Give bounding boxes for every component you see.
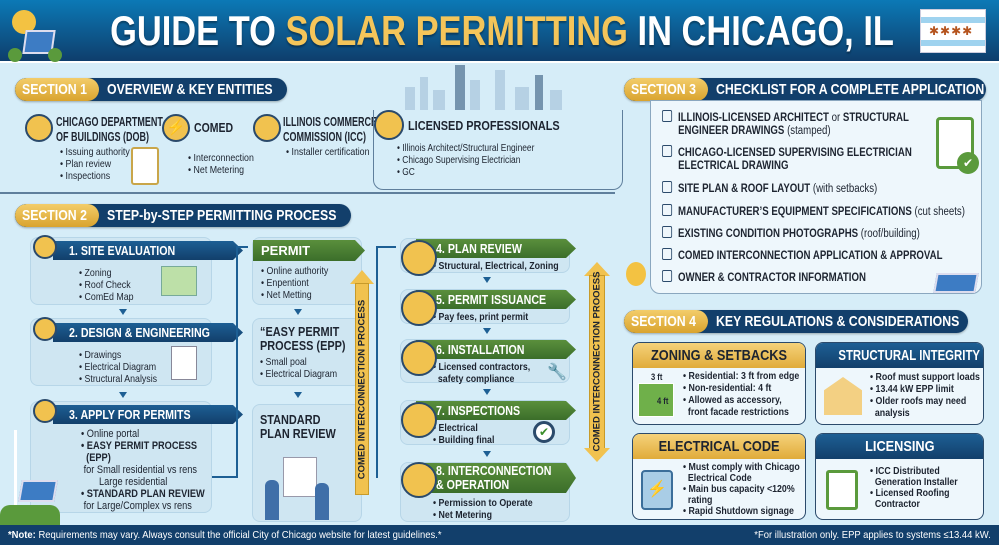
entity: ComEd: • Interconnection (188, 152, 254, 164)
step 3: apply for permits: Large residential (99, 476, 167, 488)
entity: ICC: • Installer certification (286, 146, 369, 158)
footer note: *For illustration only. EPP applies to systems ≤13.44 kW. (755, 529, 991, 541)
entity: DOB: • Plan review (60, 158, 111, 170)
step 6: installation: safety compliance (438, 373, 514, 385)
panel: easy permit process: PROCESS (EPP) (260, 338, 346, 353)
step 6: installation: 🔧 (547, 364, 567, 381)
section 3 heading: SECTION 3 (631, 81, 696, 98)
step 4: plan review: 4. PLAN REVIEW (436, 241, 522, 256)
entity: ICC: ILLINOIS COMMERCE (283, 115, 377, 129)
connector to steps 4-8 (376, 246, 378, 478)
text: OWNER & CONTRACTOR INFORMATION (678, 272, 866, 284)
section 1 heading: SECTION 1 (22, 81, 87, 98)
step 5: permit issuance: 5. PERMIT ISSUANCE (436, 292, 546, 307)
step 3: apply for permits: 3. APPLY FOR PERMITS (69, 407, 191, 422)
step 3: apply for permits: • Online portal (81, 428, 139, 440)
arrow: comed interconnection (right) (584, 262, 610, 462)
card: licensing: Contractor (875, 498, 920, 510)
step 6: installation (400, 339, 570, 383)
card: electrical code: • Rapid Shutdown signage (683, 505, 794, 517)
card: licensing (815, 433, 984, 520)
entity: ComEd: • Net Metering (188, 164, 244, 176)
entity: ComEd: ⚡ (167, 119, 185, 136)
entity: DOB (25, 114, 163, 182)
card: zoning & setbacks (632, 342, 806, 425)
panel: easy permit process: • Electrical Diagram (260, 368, 337, 380)
text: ELECTRICAL DRAWING (678, 160, 788, 172)
section 4 heading (624, 310, 968, 333)
card: licensing: • Licensed Roofing (870, 487, 950, 499)
card: electrical code: Electrical Code (688, 472, 752, 484)
step 7: inspections: 7. INSPECTIONS (436, 403, 520, 418)
skyline decoration (405, 65, 562, 110)
step 5: permit issuance: • Pay fees, print permit (433, 311, 528, 323)
card: structural integrity: • Older roofs may need (870, 395, 966, 407)
entity: DOB: CHICAGO DEPARTMENT (56, 115, 163, 129)
panel: key entities (25, 110, 623, 190)
card: zoning & setbacks: • Residential: 3 ft from edge (683, 370, 799, 382)
step 8: interconnection & operation: • Permission to Operate (433, 497, 533, 509)
step 2: design & engineering: • Electrical Diagram (79, 361, 156, 373)
footer note (0, 525, 999, 545)
section 1 heading: OVERVIEW & KEY ENTITIES (107, 81, 273, 98)
step 3: apply for permits: • STANDARD PLAN REVIEW (81, 488, 205, 500)
text: MANUFACTURER’S EQUIPMENT SPECIFICATIONS (cut sheets) (678, 206, 965, 218)
section 1 heading (15, 78, 287, 101)
card: electrical code: ⚡ (647, 481, 667, 498)
step 2: design & engineering (30, 318, 212, 386)
header banner (0, 0, 999, 63)
step 3: apply for permits: for Large/Complex vs rens (84, 500, 192, 512)
panel: standard plan review (252, 404, 362, 522)
step 8: interconnection & operation: • Net Metering (433, 509, 492, 521)
step 6: installation: 6. INSTALLATION (436, 342, 524, 357)
entity: DOB: • Issuing authority (60, 146, 130, 158)
card: structural integrity: analysis (875, 407, 910, 419)
entity: DOB: OF BUILDINGS (DOB) (56, 130, 149, 144)
step 2: design & engineering: 2. DESIGN & ENGINEERING (69, 325, 210, 340)
card: structural integrity: • Roof must support loads (870, 371, 980, 383)
card: electrical code: • Must comply with Chicago (683, 461, 800, 473)
icon: chicago flag: ✱✱✱✱ (929, 24, 973, 38)
entity: ICC (253, 114, 377, 158)
entity: ICC: COMMISSION (ICC) (283, 130, 366, 144)
step 3: apply for permits: for Small residential vs rens (84, 464, 197, 476)
text: SITE PLAN & ROOF LAYOUT (with setbacks) (678, 183, 877, 195)
arrow: comed interconnection (right): COMED INTERCONNECTION PROOESS (592, 272, 602, 452)
panel: easy permit process: • Small poal (260, 356, 307, 368)
entity: licensed professionals: • Chicago Supervising Electrician (397, 155, 520, 166)
step 4: plan review (400, 238, 570, 273)
section 2 heading (15, 204, 351, 227)
icon: solar panel (933, 273, 979, 293)
section 4 heading: SECTION 4 (631, 313, 696, 330)
section 4 heading: KEY REGULATIONS & CONSIDERATIONS (716, 313, 959, 330)
entity: licensed professionals: • GC (397, 167, 415, 178)
card: zoning & setbacks: 3 ft (651, 372, 662, 382)
card: electrical code: ELECTRICAL CODE (659, 438, 779, 455)
card: zoning & setbacks: front facade restrictions (688, 406, 789, 418)
card: structural integrity: STRUCTURAL INTEGRITY (838, 347, 980, 364)
panel: checklist (650, 100, 982, 294)
card: zoning & setbacks: ZONING & SETBACKS (651, 347, 787, 364)
section 2 heading: STEP-by-STEP PERMITTING PROCESS (107, 207, 336, 224)
step 3: apply for permits: • EASY PERMIT PROCESS (81, 440, 197, 452)
card: electrical code: rating (688, 494, 712, 506)
entity: DOB: • Inspections (60, 170, 110, 182)
entity: licensed professionals: • Illinois Architect/Structural Engineer (397, 143, 534, 154)
entity: ComEd: COMED (194, 121, 233, 135)
card: electrical code (632, 433, 806, 520)
panel: standard plan review: STANDARD (260, 412, 320, 427)
icon: sun and solar panel (8, 10, 62, 62)
card: structural integrity (815, 342, 984, 425)
footer note: *Note: Requirements may vary. Always consult the official City of Chicago website for latest guidelines.* (8, 529, 442, 541)
panel: easy permit process: “EASY PERMIT (260, 324, 339, 339)
icon: clipboard checklist: ✔ (963, 156, 973, 170)
icon: light bulb (626, 262, 646, 286)
step 2: design & engineering: • Drawings (79, 349, 121, 361)
step 8: interconnection & operation: 8. INTERCONNECTION (436, 463, 551, 478)
card: licensing: • ICC Distributed (870, 465, 940, 477)
step 8: interconnection & operation: & OPERATION (436, 477, 509, 492)
step 7: inspections: ✔ (539, 425, 549, 439)
text: ENGINEER DRAWINGS (stamped) (678, 125, 831, 137)
step 7: inspections (400, 400, 570, 445)
step 1: site evaluation: 1. SITE EVALUATION (69, 243, 175, 258)
text: ILLINOIS-LICENSED ARCHITECT or STRUCTURAL (678, 112, 909, 124)
icon: clipboard checklist (936, 117, 974, 169)
panel: permit: • Net Metting (261, 289, 312, 301)
arrow: comed interconnection (middle) (350, 270, 374, 495)
step 8: interconnection & operation (400, 462, 570, 522)
section 3 heading: CHECKLIST FOR A COMPLETE APPLICATION (716, 81, 984, 98)
step 4: plan review: • Structural, Electrical, Zoning (433, 260, 559, 272)
panel: permit (252, 237, 362, 305)
icon: clipboard (131, 147, 159, 185)
icon: chicago flag (920, 9, 986, 53)
step 1: site evaluation: • ComEd Map (79, 291, 134, 303)
panel: easy permit process (252, 318, 362, 386)
card: structural integrity: • 13.44 kW EPP limit (870, 383, 954, 395)
entity: ComEd (162, 114, 254, 176)
text: COMED INTERCONNECTION APPLICATION & APPROVAL (678, 250, 943, 262)
step 6: installation: • Licensed contractors, (433, 361, 530, 373)
panel: permit: • Online authority (261, 265, 328, 277)
panel: permit: • Enpentiont (261, 277, 309, 289)
card: zoning & setbacks: 4 ft (657, 396, 668, 406)
panel: permit: PERMIT (261, 243, 310, 258)
section 3 heading (624, 78, 986, 101)
card: licensing: Generation Installer (875, 476, 958, 488)
card: zoning & setbacks: • Allowed as accessory, (683, 394, 782, 406)
step 5: permit issuance (400, 289, 570, 324)
arrow: comed interconnection (middle): COMED INTERCONNECTION PROCESS (356, 300, 368, 479)
section 2 heading: SECTION 2 (22, 207, 87, 224)
card: zoning & setbacks: • Non-residential: 4 ft (683, 382, 771, 394)
step 1: site evaluation: • Zoning (79, 267, 112, 279)
step 1: site evaluation: • Roof Check (79, 279, 131, 291)
panel: standard plan review: PLAN REVIEW (260, 426, 336, 441)
card: electrical code: • Main bus capacity <120% (683, 483, 795, 495)
flow connector to permit column (236, 246, 238, 478)
text: CHICAGO-LICENSED SUPERVISING ELECTRICIAN (678, 147, 912, 159)
step 1: site evaluation (30, 237, 212, 305)
entity: licensed professionals: LICENSED PROFESSIONALS (408, 118, 560, 133)
step 2: design & engineering: • Structural Analysis (79, 373, 157, 385)
step 3: apply for permits (30, 401, 212, 513)
step 7: inspections: • Building final (433, 434, 494, 446)
card: licensing: LICENSING (865, 438, 934, 455)
title: GUIDE TO SOLAR PERMITTING IN CHICAGO, IL (110, 7, 894, 54)
step 7: inspections: • Electrical (433, 422, 478, 434)
step 3: apply for permits: (EPP) (86, 452, 111, 464)
icon: wind turbine and solar panel (0, 430, 60, 525)
text: EXISTING CONDITION PHOTOGRAPHS (roof/building) (678, 228, 920, 240)
icon: workers with chart (283, 457, 317, 497)
entity: licensed professionals (373, 110, 623, 190)
